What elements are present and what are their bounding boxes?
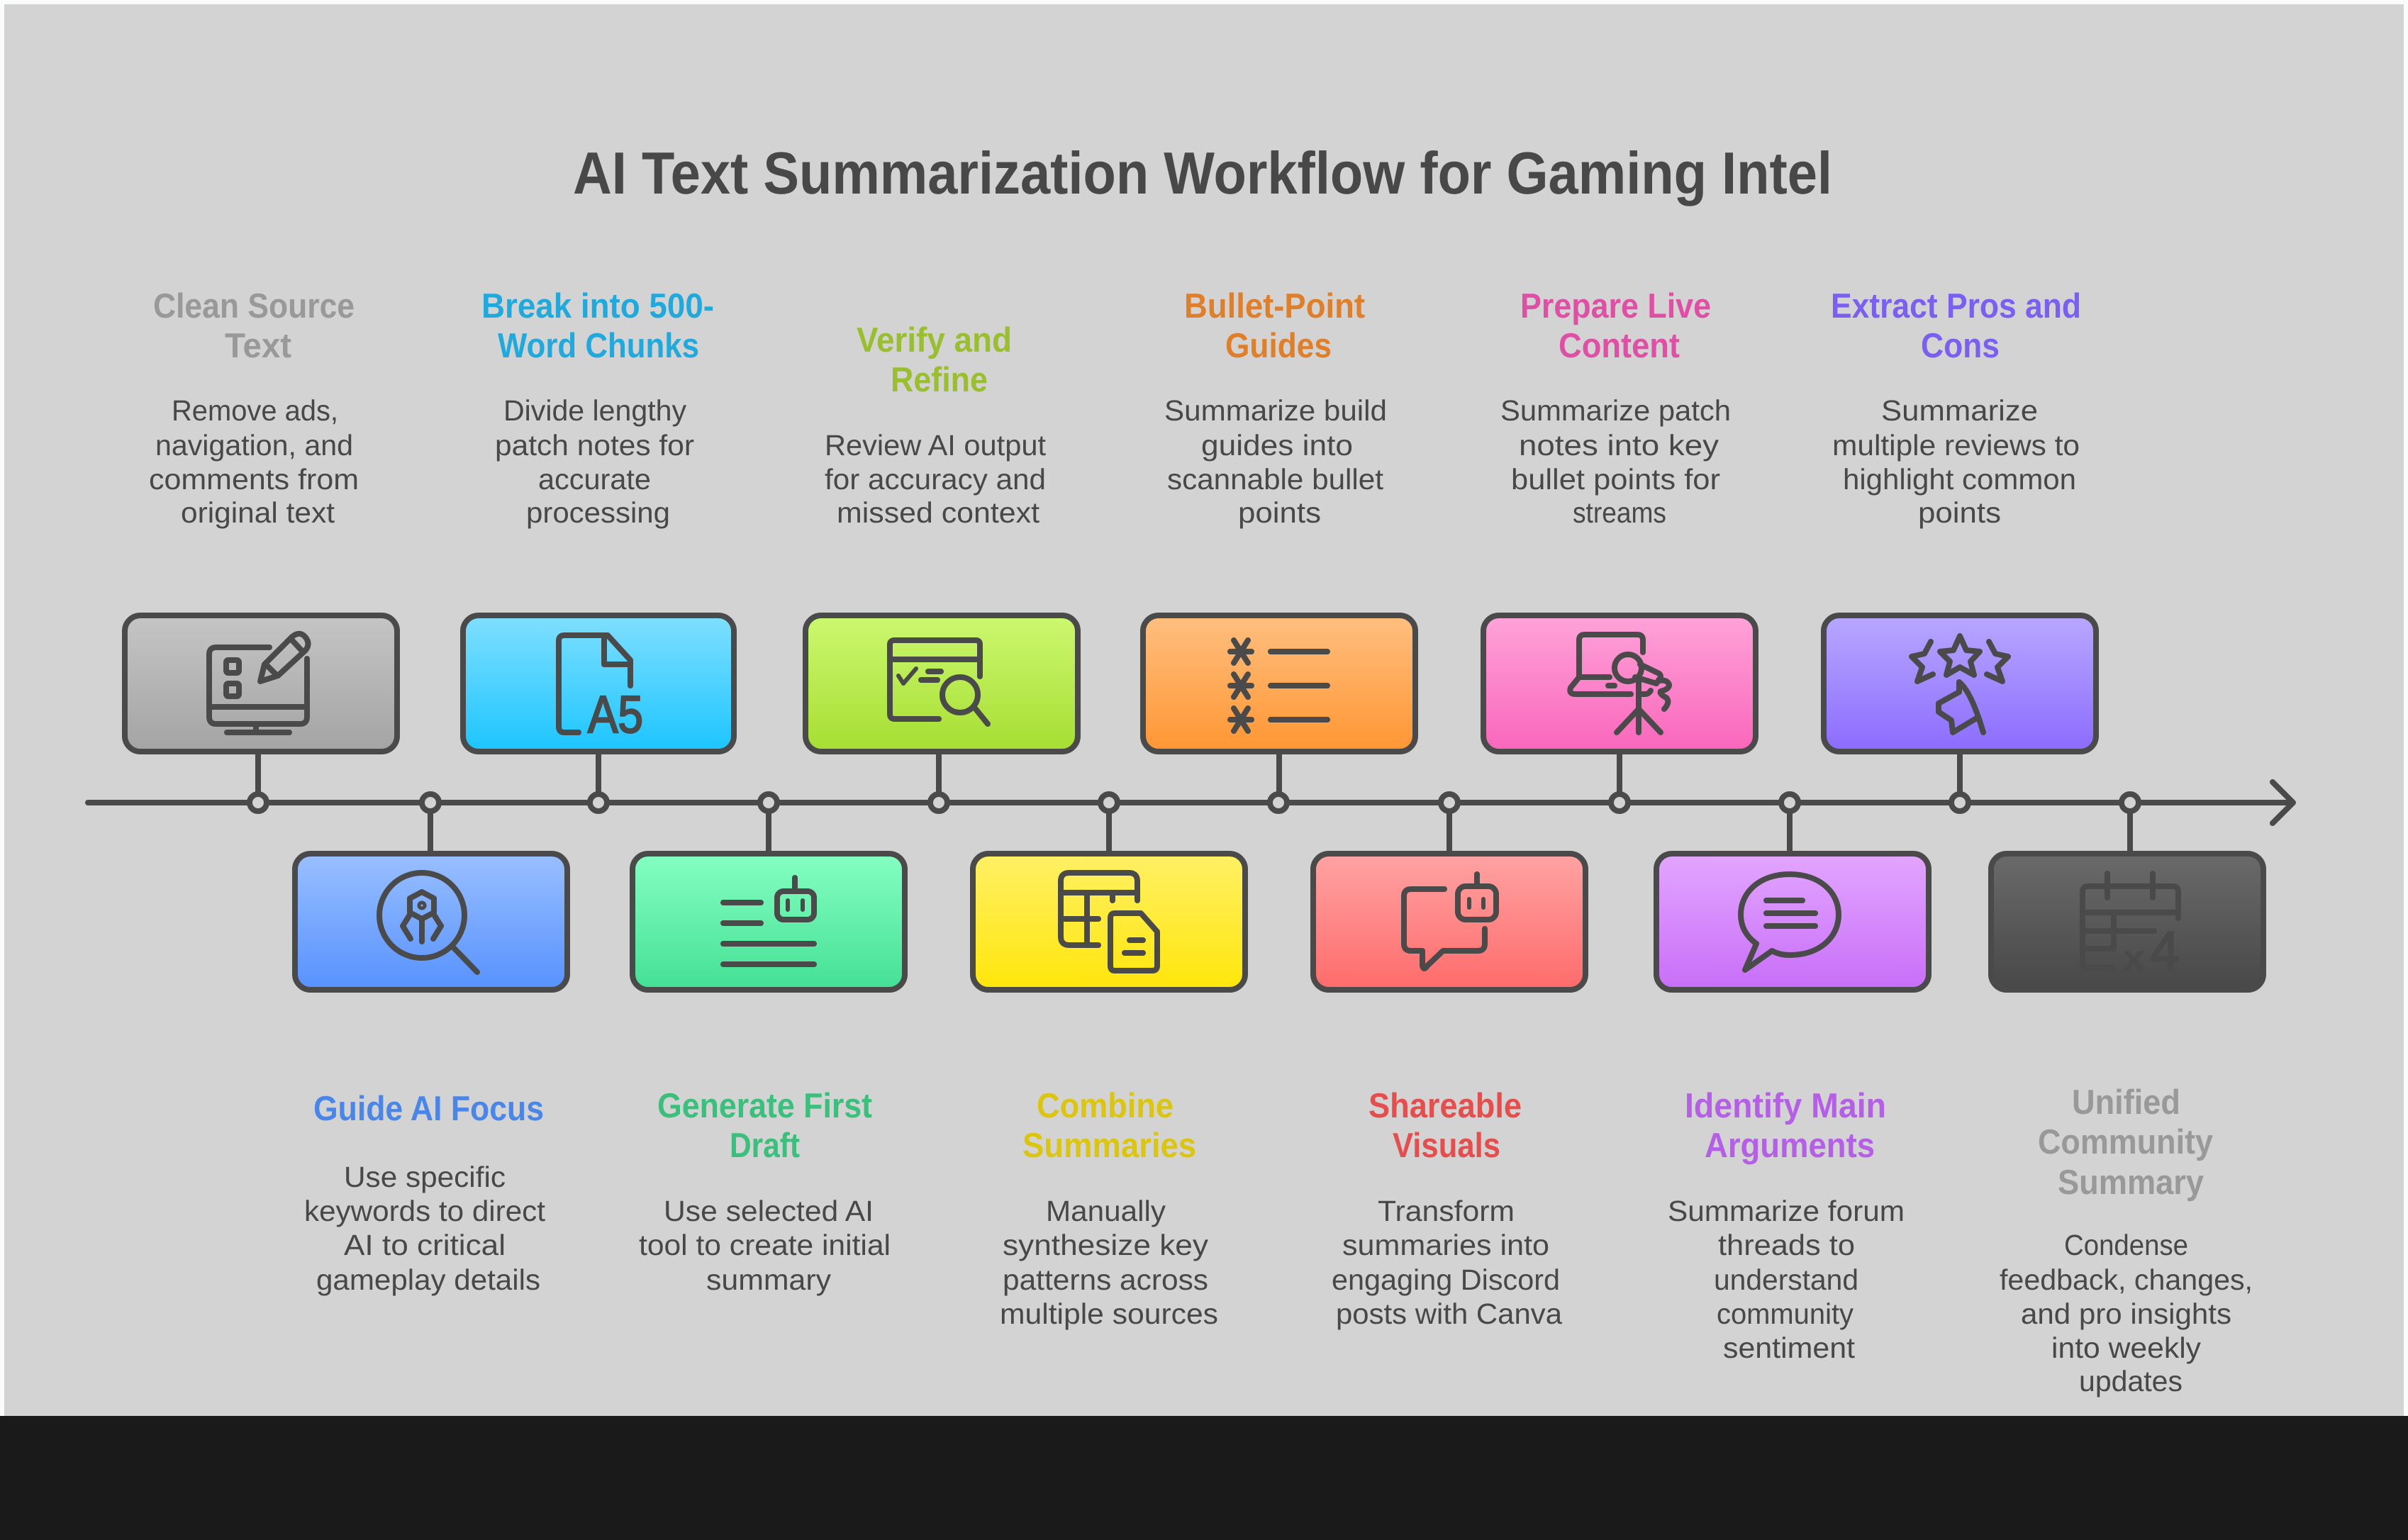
step: Verify and Refine xyxy=(806,321,1078,793)
description: scannable bullet xyxy=(1167,463,1384,496)
description: points xyxy=(1918,496,2001,529)
description: posts with Canva xyxy=(1336,1298,1562,1330)
description xyxy=(1832,394,2080,529)
connector xyxy=(1106,813,1112,851)
description: community xyxy=(1717,1298,1854,1330)
description: Remove ads, xyxy=(172,394,338,427)
description: keywords to direct xyxy=(304,1195,546,1227)
description: Summarize forum xyxy=(1668,1195,1905,1227)
connector xyxy=(1787,813,1793,851)
description: Condense xyxy=(2064,1229,2188,1261)
connector xyxy=(1617,754,1622,793)
box xyxy=(806,615,1078,752)
description: multiple sources xyxy=(1000,1298,1218,1330)
heading: Bullet-Point xyxy=(1184,287,1365,325)
description: Summarize build xyxy=(1164,394,1387,427)
description: understand xyxy=(1714,1263,1858,1296)
step: Identify Main Arguments xyxy=(1656,813,1929,1364)
heading xyxy=(481,287,714,365)
heading: Content xyxy=(1559,327,1680,365)
icon: checklist with magnifier xyxy=(890,640,988,724)
description: guides into xyxy=(1201,429,1353,462)
description xyxy=(149,394,359,529)
description xyxy=(825,429,1047,529)
heading xyxy=(1831,287,2081,365)
heading: Combine xyxy=(1037,1087,1174,1125)
description xyxy=(2000,1229,2253,1397)
heading xyxy=(857,321,1012,399)
description: tool to create initial xyxy=(639,1229,891,1261)
description: engaging Discord xyxy=(1332,1263,1560,1296)
connector xyxy=(1957,754,1963,793)
description: summary xyxy=(706,1263,832,1296)
box xyxy=(295,854,567,990)
connector xyxy=(766,813,771,851)
step: Prepare Live Content xyxy=(1483,287,1756,793)
box xyxy=(1483,615,1756,752)
description: Transform xyxy=(1378,1195,1515,1227)
step: Shareable Visuals xyxy=(1313,813,1585,1330)
description xyxy=(1164,394,1387,529)
icon: calendar x4: 4 xyxy=(2150,921,2180,981)
heading xyxy=(1022,1087,1196,1165)
icon: table and document xyxy=(1061,873,1157,971)
step: Combine Summaries xyxy=(973,813,1245,1330)
icon: A5 document: A5 xyxy=(588,685,643,744)
icon: calendar x4 xyxy=(2083,874,2180,981)
description: summaries into xyxy=(1342,1229,1549,1261)
description: AI to critical xyxy=(344,1229,506,1261)
description: original text xyxy=(181,496,335,529)
heading: Summaries xyxy=(1022,1127,1196,1165)
heading: Break into 500- xyxy=(481,287,714,325)
description: Use specific xyxy=(344,1161,506,1193)
box xyxy=(973,854,1245,990)
icon: magnifier with robot arm xyxy=(379,873,477,972)
description: points xyxy=(1238,496,1321,529)
heading: Identify Main xyxy=(1685,1087,1886,1125)
icon: laptop and microphone stand xyxy=(1570,635,1669,732)
description: accurate xyxy=(538,463,651,496)
description: for accuracy and xyxy=(825,463,1046,496)
box xyxy=(125,615,397,752)
description: gameplay details xyxy=(316,1263,540,1296)
heading xyxy=(153,287,355,365)
description: and pro insights xyxy=(2021,1298,2231,1330)
heading: Refine xyxy=(891,361,988,399)
box xyxy=(1991,854,2263,990)
heading xyxy=(1369,1087,1522,1165)
description: patterns across xyxy=(1003,1263,1208,1296)
description: navigation, and xyxy=(155,429,353,462)
description: feedback, changes, xyxy=(2000,1263,2253,1296)
box xyxy=(1656,854,1929,990)
heading: Shareable xyxy=(1369,1087,1522,1125)
connector xyxy=(1447,813,1452,851)
box xyxy=(463,615,734,752)
step: Extract Pros and Cons xyxy=(1824,287,2096,793)
heading xyxy=(1184,287,1365,365)
bottom dark band xyxy=(0,1416,2408,1540)
box xyxy=(1313,854,1585,990)
heading xyxy=(1520,287,1711,365)
heading: Prepare Live xyxy=(1520,287,1711,325)
connector xyxy=(1276,754,1282,793)
heading: Word Chunks xyxy=(498,327,699,365)
box xyxy=(1824,615,2096,752)
description: updates xyxy=(2079,1365,2183,1397)
step: Guide AI Focus xyxy=(295,813,567,1296)
icon: stars and megaphone xyxy=(1912,636,2008,732)
connector xyxy=(2127,813,2133,851)
timeline with arrow xyxy=(88,782,2293,823)
title: AI Text Summarization Workflow for Gaming Intel xyxy=(573,140,1832,206)
heading: Summary xyxy=(2058,1164,2204,1202)
heading xyxy=(657,1087,872,1165)
step: Unified Community Summary xyxy=(1991,813,2263,1397)
heading: Extract Pros and xyxy=(1831,287,2081,325)
box xyxy=(1143,615,1415,752)
step: Clean Source Text xyxy=(125,287,397,793)
description xyxy=(639,1195,891,1296)
heading: Visuals xyxy=(1393,1127,1500,1165)
step: Generate First Draft xyxy=(632,813,905,1296)
description: multiple reviews to xyxy=(1832,429,2080,462)
description xyxy=(1332,1195,1562,1330)
heading: Guides xyxy=(1225,327,1332,365)
description: missed context xyxy=(837,496,1040,529)
description xyxy=(1668,1195,1905,1364)
box xyxy=(632,854,905,990)
icon: speech bubble xyxy=(1741,874,1839,970)
icon: bullet list xyxy=(1230,640,1327,731)
heading xyxy=(1685,1087,1886,1165)
description xyxy=(1500,394,1731,529)
heading: Verify and xyxy=(857,321,1012,359)
description xyxy=(495,394,694,529)
description: synthesize key xyxy=(1003,1229,1209,1261)
icon: robot writing lines xyxy=(723,878,814,964)
description: bullet points for xyxy=(1511,463,1720,496)
heading: Arguments xyxy=(1705,1127,1875,1165)
description: patch notes for xyxy=(495,429,694,462)
heading: Clean Source xyxy=(153,287,355,325)
description: Summarize patch xyxy=(1500,394,1731,427)
description: Summarize xyxy=(1881,394,2038,427)
description: into weekly xyxy=(2051,1332,2202,1364)
description: Manually xyxy=(1046,1195,1166,1227)
description xyxy=(304,1161,546,1296)
icon: calendar x4: x xyxy=(2124,939,2144,976)
description: notes into key xyxy=(1519,429,1719,462)
connector xyxy=(936,754,942,793)
description: Review AI output xyxy=(825,429,1047,462)
connector xyxy=(596,754,601,793)
heading: Generate First xyxy=(657,1087,872,1125)
heading: Guide AI Focus xyxy=(313,1090,544,1128)
heading xyxy=(2038,1083,2213,1202)
step: Break into 500-Word Chunks xyxy=(463,287,734,793)
connector xyxy=(428,813,433,851)
description: sentiment xyxy=(1723,1332,1856,1364)
heading: Draft xyxy=(730,1127,800,1165)
description: threads to xyxy=(1718,1229,1855,1261)
description: Use selected AI xyxy=(664,1195,874,1227)
heading: Unified xyxy=(2072,1083,2180,1122)
connector xyxy=(255,754,261,793)
icon: monitor with pencil xyxy=(209,634,308,732)
description: streams xyxy=(1573,496,1666,529)
icon: A5 document xyxy=(559,635,643,744)
description: processing xyxy=(526,496,670,529)
heading: Cons xyxy=(1921,327,2000,365)
description: highlight common xyxy=(1843,463,2076,496)
heading: Community xyxy=(2038,1123,2213,1161)
icon: chat bubble with robot xyxy=(1404,874,1496,969)
description xyxy=(1000,1195,1218,1330)
description: comments from xyxy=(149,463,359,496)
description: Divide lengthy xyxy=(503,394,687,427)
heading: Text xyxy=(225,327,291,365)
step: Bullet-Point Guides xyxy=(1143,287,1415,793)
